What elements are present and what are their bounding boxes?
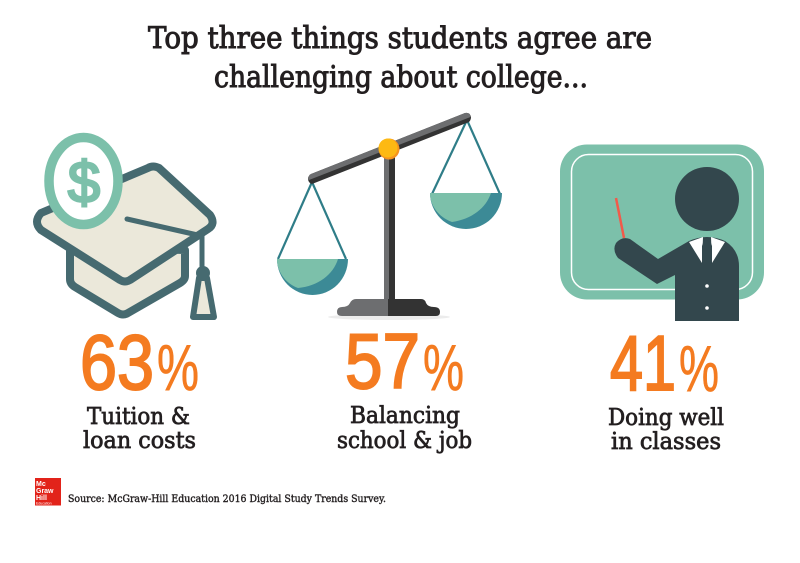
stat: 41% classes: in classes (611, 429, 721, 455)
title: Top three things students agree are (148, 21, 652, 56)
left pan (277, 259, 348, 295)
pointer (616, 198, 624, 238)
stat: 57% balancing: % (423, 331, 464, 404)
stat: 63% tuition: % (157, 331, 199, 404)
logo: McGraw-Hill Education: Hill (36, 495, 47, 502)
cap base (70, 247, 185, 314)
scale shadow (328, 314, 450, 320)
right pan (430, 193, 502, 229)
cap board (37, 166, 213, 282)
dollar sign: $ (68, 150, 100, 215)
left pan strings (278, 182, 346, 259)
tie (702, 240, 712, 264)
right pan strings (432, 120, 500, 194)
source note: Source: McGraw-Hill Education 2016 Digital Study Trends Survey. (68, 493, 386, 505)
chalkboard (560, 144, 764, 300)
shirt collar (689, 237, 725, 263)
scale beam (308, 113, 471, 184)
teacher head (675, 167, 739, 231)
stat: 63% tuition: 63 (80, 318, 154, 406)
logo: McGraw-Hill Education (35, 478, 61, 506)
logo: McGraw-Hill Education: Education (36, 502, 52, 506)
dollar coin (49, 138, 118, 224)
logo: McGraw-Hill Education: Mc (36, 481, 46, 488)
logo: McGraw-Hill Education: Graw (36, 488, 54, 495)
scale post (384, 155, 395, 305)
scale base (337, 299, 388, 316)
stat: 41% classes: Doing well (608, 405, 724, 431)
stat: 41% classes (608, 319, 724, 455)
stat: 41% classes: % (679, 332, 719, 405)
stat: 63% tuition: loan costs (83, 428, 196, 454)
title: challenging about college... (214, 60, 588, 95)
stat: 57% balancing: 57 (345, 317, 420, 405)
title (148, 21, 652, 95)
icon: balance scale (277, 113, 502, 320)
stat: 57% balancing: Balancing (350, 403, 460, 429)
stat: 57% balancing (337, 317, 472, 454)
icon: graduation cap with dollar coin (37, 138, 214, 317)
jacket buttons (705, 284, 709, 288)
stat: 57% balancing: school & job (337, 428, 472, 454)
stat: 41% classes: 41 (610, 319, 676, 407)
tassel (193, 278, 214, 317)
tassel cord (127, 219, 202, 272)
stat: 63% tuition: Tuition & (87, 404, 190, 430)
scale pivot (378, 138, 400, 160)
teacher body and arm (614, 237, 739, 321)
icon: teacher at chalkboard (560, 144, 764, 321)
stat: 63% tuition (80, 318, 199, 454)
